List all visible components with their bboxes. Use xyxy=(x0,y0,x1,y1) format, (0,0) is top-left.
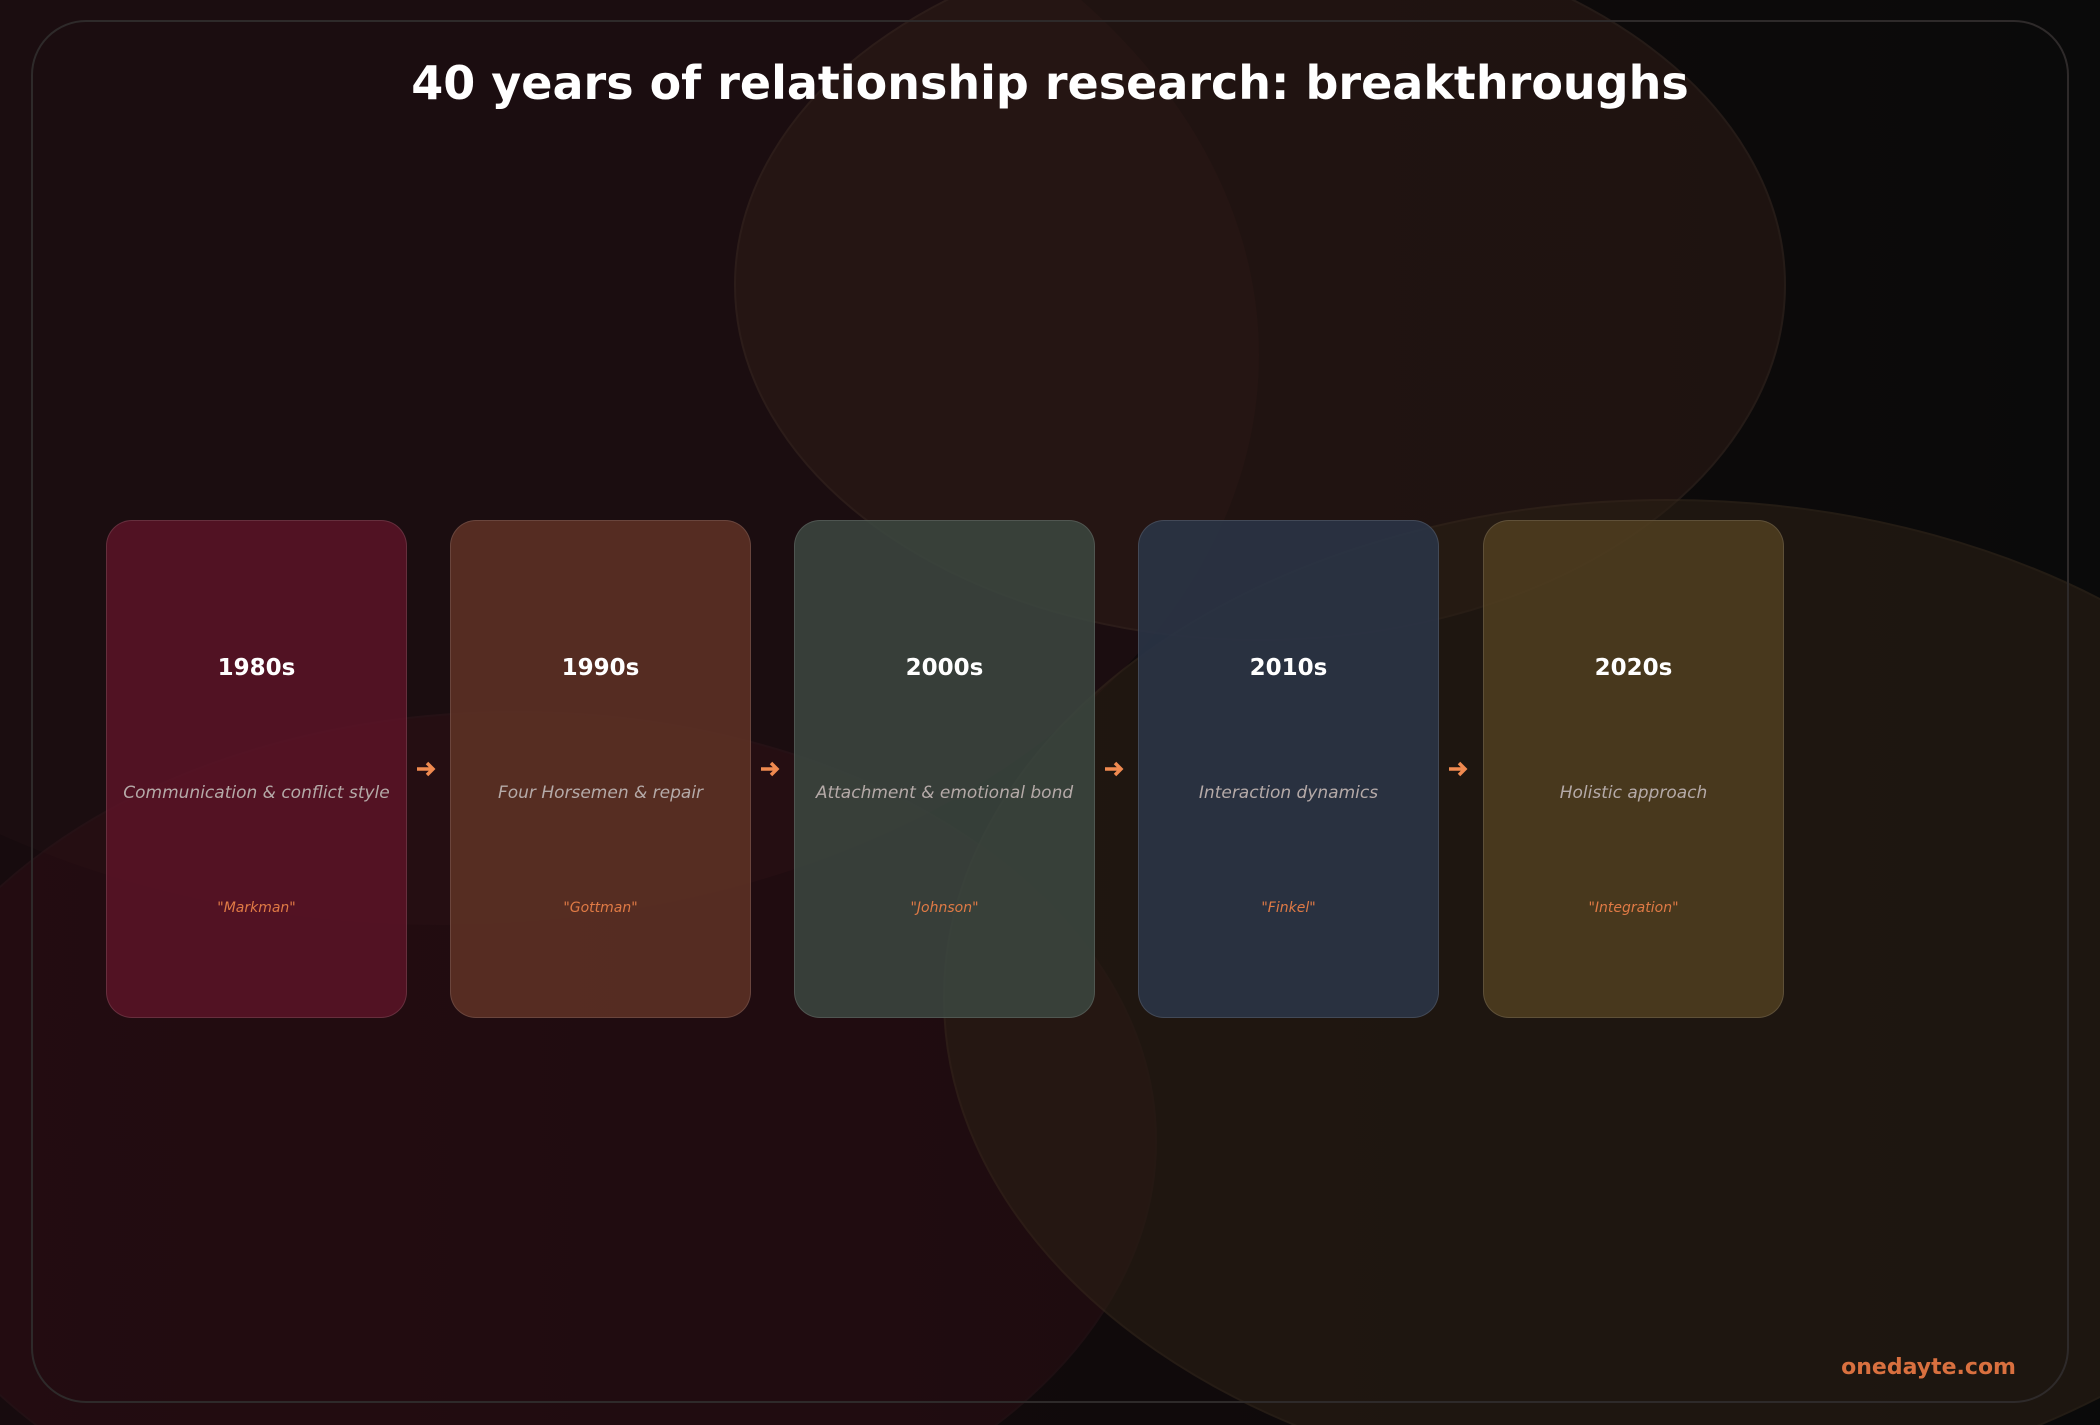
card: 2000s: 2000s xyxy=(906,655,983,681)
card: 2010s: Interaction dynamics xyxy=(1199,783,1378,803)
arrow 1 xyxy=(417,762,436,776)
arrow 3 xyxy=(1105,762,1124,776)
card: 1990s: Four Horsemen & repair xyxy=(498,783,703,803)
card: 1990s xyxy=(450,520,751,1018)
card: 2020s: Holistic approach xyxy=(1560,783,1707,803)
card: 2010s: 2010s xyxy=(1250,655,1327,681)
card: 1980s xyxy=(106,520,407,1018)
arrow 4 xyxy=(1449,762,1468,776)
card: 2000s: "Johnson" xyxy=(910,900,979,916)
title: 40 years of relationship research: breakthroughs xyxy=(411,56,1689,110)
card: 2010s xyxy=(1138,520,1439,1018)
card: 1980s: Communication & conflict style xyxy=(123,783,390,803)
card: 1990s: 1990s xyxy=(562,655,639,681)
card: 1990s: "Gottman" xyxy=(563,900,638,916)
card: 2000s: Attachment & emotional bond xyxy=(816,783,1073,803)
card: 1980s: 1980s xyxy=(218,655,295,681)
footer brand: onedayte.com xyxy=(1841,1355,2016,1380)
card: 2020s: 2020s xyxy=(1595,655,1672,681)
card: 2010s: "Finkel" xyxy=(1261,900,1316,916)
arrow 2 xyxy=(761,762,780,776)
card: 2020s xyxy=(1483,520,1784,1018)
card: 1980s: "Markman" xyxy=(217,900,296,916)
card: 2000s xyxy=(794,520,1095,1018)
card: 2020s: "Integration" xyxy=(1588,900,1679,916)
